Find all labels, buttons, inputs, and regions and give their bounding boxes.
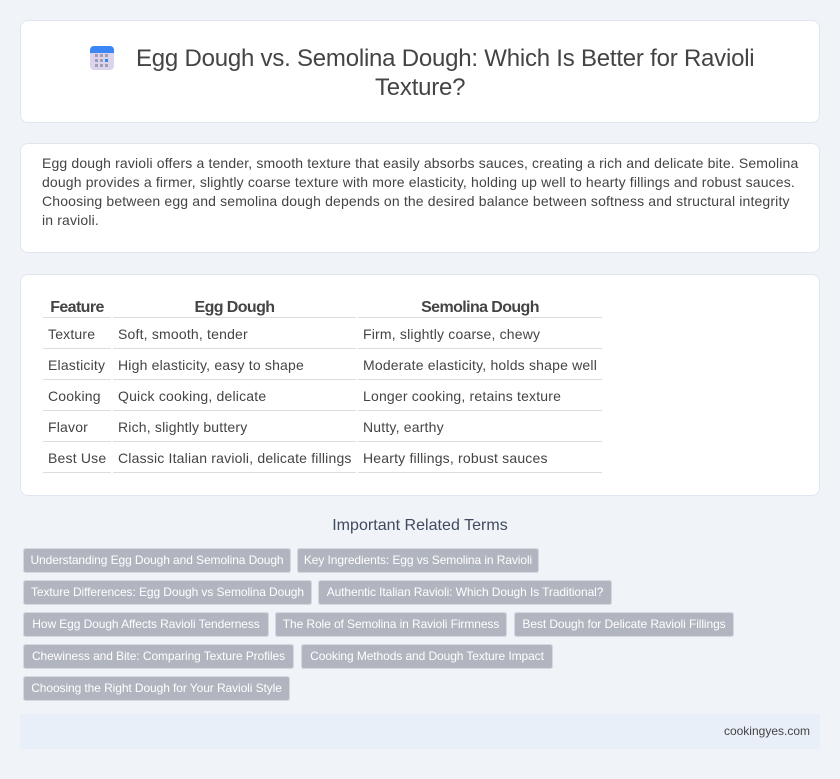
row: elasticity: Elasticity [48,357,105,373]
heading: important related terms: Important Related Terms [332,517,508,534]
row: cooking: Cooking [48,388,101,404]
row: texture: Texture [48,326,95,342]
related term tags [23,548,734,701]
comparison table [43,299,602,473]
comparison table: Quick cooking, delicate [118,388,266,404]
comparison table: Hearty fillings, robust sauces [363,450,548,466]
related term tags: Chewiness and Bite: Comparing Texture Profiles [32,649,285,663]
related term tags: Key Ingredients: Egg vs Semolina in Ravioli [304,553,532,567]
comparison table: Semolina Dough [421,299,539,316]
row: flavor: Flavor [48,419,88,435]
related term tags: Choosing the Right Dough for Your Ravioli Style [31,681,282,695]
icon: calendar [90,46,114,70]
title [136,45,754,101]
related term tags: Understanding Egg Dough and Semolina Dough [30,553,284,567]
title: Egg Dough vs. Semolina Dough: Which Is Better for Ravioli [136,45,754,72]
related term tags: Texture Differences: Egg Dough vs Semolina Dough [31,585,304,599]
summary text: in ravioli. [42,212,99,228]
summary text [42,155,798,228]
title: Texture? [375,74,465,101]
comparison table: High elasticity, easy to shape [118,357,304,373]
footer bar [20,714,820,749]
related term tags: How Egg Dough Affects Ravioli Tenderness [32,617,260,631]
comparison table: Rich, slightly buttery [118,419,247,435]
panel: comparison table [20,274,820,496]
related term tags: Authentic Italian Ravioli: Which Dough Is Traditional? [327,585,603,599]
summary text: dough provides a firmer, slightly coarse texture with more elasticity, holding up well to hearty fillings and robust sauces. [42,174,795,190]
footer source: cookingyes.com [724,724,810,738]
panel: summary paragraph [20,143,820,253]
comparison table: Soft, smooth, tender [118,326,248,342]
comparison table: Moderate elasticity, holds shape well [363,357,597,373]
comparison table: Classic Italian ravioli, delicate fillings [118,450,352,466]
comparison table: Longer cooking, retains texture [363,388,561,404]
related term tags: The Role of Semolina in Ravioli Firmness [283,617,499,631]
comparison table: Firm, slightly coarse, chewy [363,326,540,342]
comparison table: Egg Dough [195,299,274,316]
summary text: Egg dough ravioli offers a tender, smooth texture that easily absorbs sauces, creating a rich and delicate bite. Semolina [42,155,798,171]
row: best use: Best Use [48,450,106,466]
comparison table: Nutty, earthy [363,419,444,435]
summary text: Choosing between egg and semolina dough depends on the desired balance between softness and structural integrity [42,193,790,209]
header panel [20,20,820,123]
related term tags: Cooking Methods and Dough Texture Impact [310,649,544,663]
table header: Feature [50,299,104,316]
related term tags: Best Dough for Delicate Ravioli Fillings [522,617,726,631]
